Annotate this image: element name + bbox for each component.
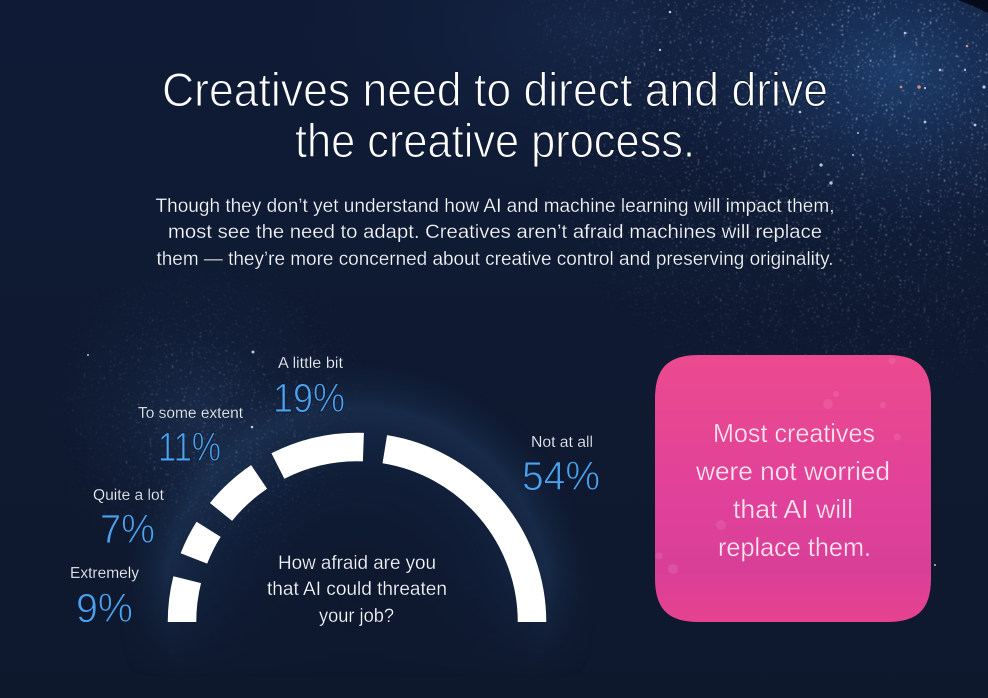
panel: pink callout xyxy=(655,355,931,622)
callout background xyxy=(655,355,931,622)
label: Quite a lot 7%: Quite a lot xyxy=(93,487,165,504)
label: Extremely 9%: Extremely xyxy=(70,565,139,582)
callout text: replace them. xyxy=(718,532,871,562)
segment: To some extent 11% xyxy=(221,477,259,512)
intro text block xyxy=(156,196,834,270)
label: A little bit 19%: A little bit xyxy=(278,355,344,372)
title xyxy=(162,63,828,167)
segment: Extremely 9% xyxy=(182,580,187,622)
title: Creatives need to direct and drive xyxy=(162,63,828,116)
callout bokeh xyxy=(656,358,900,574)
label: A little bit 19% xyxy=(273,355,345,421)
segment: Not at all 54% xyxy=(385,449,532,622)
callout text xyxy=(695,418,890,562)
label: Extremely 9%: 9% xyxy=(76,585,133,631)
label: Not at all 54%: 54% xyxy=(522,453,600,499)
intro text block: most see the need to adapt. Creatives aren’t afraid machines will replace xyxy=(168,222,822,243)
label: Not at all 54% xyxy=(522,434,600,499)
label: To some extent 11%: 11% xyxy=(158,424,221,470)
chart question: your job? xyxy=(319,606,394,627)
label: To some extent 11%: To some extent xyxy=(138,405,244,422)
semicircle gauge chart xyxy=(182,447,532,622)
chart question: that AI could threaten xyxy=(267,579,447,600)
label: Quite a lot 7%: 7% xyxy=(100,506,155,552)
chart question xyxy=(267,553,447,627)
intro text block: them — they’re more concerned about creative control and preserving originality. xyxy=(156,249,834,270)
label: To some extent 11% xyxy=(138,405,244,470)
segment: A little bit 19% xyxy=(278,447,363,466)
label: Quite a lot 7% xyxy=(93,487,165,552)
segment: Quite a lot 7% xyxy=(194,529,209,558)
label: A little bit 19%: 19% xyxy=(273,375,345,421)
callout text: were not worried xyxy=(695,456,890,486)
label: Extremely 9% xyxy=(70,565,139,631)
callout text: Most creatives xyxy=(713,418,875,448)
callout text: that AI will xyxy=(733,494,853,524)
chart question: How afraid are you xyxy=(278,553,436,574)
label: Not at all 54%: Not at all xyxy=(531,434,593,451)
title: the creative process. xyxy=(295,114,695,167)
intro text block: Though they don’t yet understand how AI and machine learning will impact them, xyxy=(156,196,834,217)
